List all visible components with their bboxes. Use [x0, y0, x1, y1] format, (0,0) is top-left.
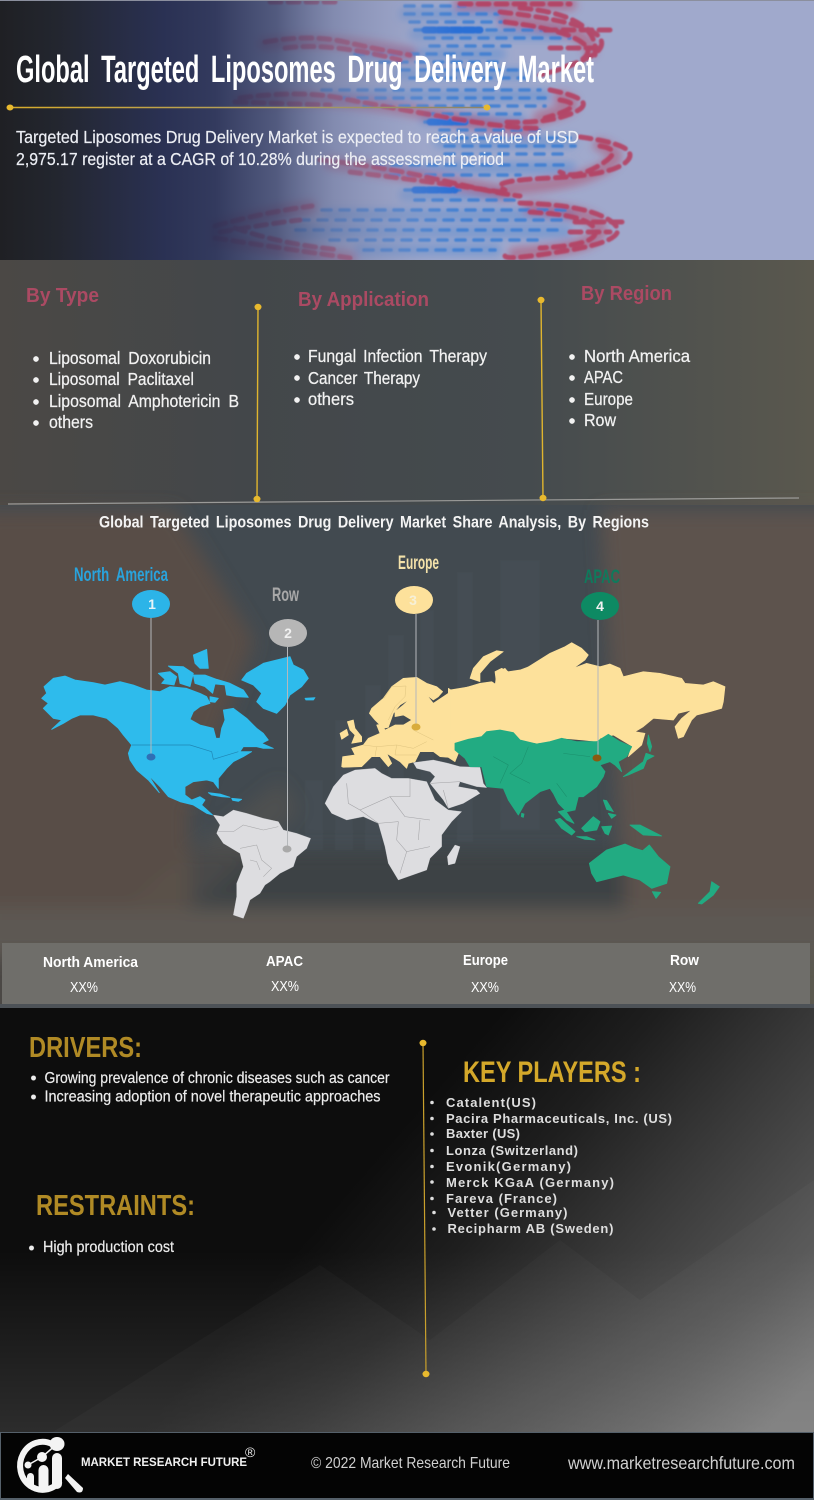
label: North America: [74, 565, 168, 586]
list: drivers: Growing prevalence of chronic diseases such as cancer: [44, 1070, 390, 1087]
list: key players: Catalent(US): [446, 1095, 536, 1110]
list: by type: Liposomal Doxorubicin: [49, 348, 211, 368]
heading: by type: By Type: [26, 285, 99, 307]
panel: by type: [26, 285, 239, 432]
copyright: © 2022 Market Research Future: [311, 1455, 510, 1472]
photo background: segmentation and map area: [0, 260, 814, 1010]
brand name: MARKET RESEARCH FUTURE: [81, 1455, 247, 1469]
heading: key players: KEY PLAYERS :: [463, 1056, 641, 1089]
row share: [669, 952, 699, 996]
list: key players: Lonza (Switzerland): [446, 1143, 578, 1158]
footer: [0, 1432, 814, 1500]
list: key players: Pacira Pharmaceuticals, Inc. (US): [446, 1111, 672, 1126]
apac share: XX%: [271, 978, 299, 995]
intro text: [16, 127, 579, 169]
panel: drivers restraints key players: [0, 1004, 814, 1440]
callout: north america pin: 1: [148, 596, 156, 612]
callout: north america pin: [74, 565, 170, 760]
list: by application: [294, 346, 487, 409]
divider connectors: [8, 297, 799, 504]
panel: by region: [569, 283, 690, 430]
list: key players: Merck KGaA (Germany): [446, 1175, 614, 1190]
north america share: XX%: [70, 979, 98, 996]
callout: europe pin: 3: [409, 592, 417, 608]
list: by application: Fungal Infection Therapy: [308, 346, 487, 366]
apac share: [266, 953, 303, 995]
row: south america africa middle east: [213, 760, 487, 918]
heading: drivers: DRIVERS:: [29, 1032, 142, 1064]
russia east: [450, 643, 725, 757]
list: by region: Row: [584, 410, 616, 430]
heading: by region: By Region: [581, 283, 672, 305]
callout: apac pin: [581, 567, 620, 762]
section heading: share analysis: Global Targeted Liposomes Drug Delivery Market Share Analysis, By Regions: [99, 512, 649, 532]
list: by type: Liposomal Paclitaxel: [49, 369, 194, 389]
vertical connector: [420, 1040, 430, 1377]
list: key players: Vetter (Germany): [448, 1205, 568, 1220]
label: Row: [272, 585, 299, 606]
list: by type: Liposomal Amphotericin B: [49, 391, 239, 411]
footer: ®: [245, 1444, 256, 1460]
callout: apac pin: 4: [596, 598, 604, 614]
north america: [42, 649, 315, 815]
list: by region: Europe: [584, 389, 633, 409]
europe share: Europe: [463, 952, 508, 969]
world map: [42, 643, 725, 918]
list: key players: Evonik(Germany): [446, 1159, 571, 1174]
list: by application: Cancer Therapy: [308, 368, 420, 388]
row share: Row: [670, 952, 699, 969]
list: key players: Fareva (France): [446, 1191, 557, 1206]
list: key players: [430, 1095, 672, 1236]
list: by region: [569, 346, 690, 430]
callout: row pin: [269, 585, 307, 852]
list: by region: APAC: [584, 367, 623, 387]
list: restraints: High production cost: [43, 1239, 174, 1256]
list: key players: Baxter (US): [446, 1126, 520, 1141]
icon: company logo: [20, 1437, 83, 1492]
heading: by application: By Application: [298, 289, 429, 311]
list: by application: others: [308, 389, 354, 409]
title rule: [6, 104, 490, 110]
panel: by application: [294, 289, 487, 409]
list: key players: Recipharm AB (Sweden): [448, 1221, 614, 1236]
list: by type: others: [49, 412, 93, 432]
north america share: North America: [43, 954, 139, 971]
callout: row pin: 2: [284, 625, 292, 641]
list: by type: [33, 348, 239, 432]
intro text: Targeted Liposomes Drug Delivery Market is expected to reach a value of USD: [16, 127, 579, 147]
heading: restraints: RESTRAINTS:: [36, 1190, 195, 1222]
market share strip: [2, 943, 810, 1004]
DNA helix illustration: [215, 2, 630, 258]
europe share: [463, 952, 508, 996]
north america share: [43, 954, 139, 996]
label: APAC: [584, 567, 620, 588]
europe share: XX%: [471, 979, 499, 996]
header banner: [0, 0, 814, 261]
apac share: APAC: [266, 953, 303, 970]
intro text: 2,975.17 register at a CAGR of 10.28% during the assessment period: [16, 149, 504, 169]
europe: [340, 643, 725, 768]
row share: XX%: [669, 979, 696, 996]
list: by region: North America: [584, 346, 690, 366]
label: Europe: [398, 553, 439, 574]
list: drivers: [31, 1070, 390, 1106]
website: www.marketresearchfuture.com: [567, 1453, 795, 1473]
apac: [455, 730, 719, 904]
list: drivers: Increasing adoption of novel therapeutic approaches: [44, 1088, 380, 1106]
callout: europe pin: [395, 553, 439, 730]
